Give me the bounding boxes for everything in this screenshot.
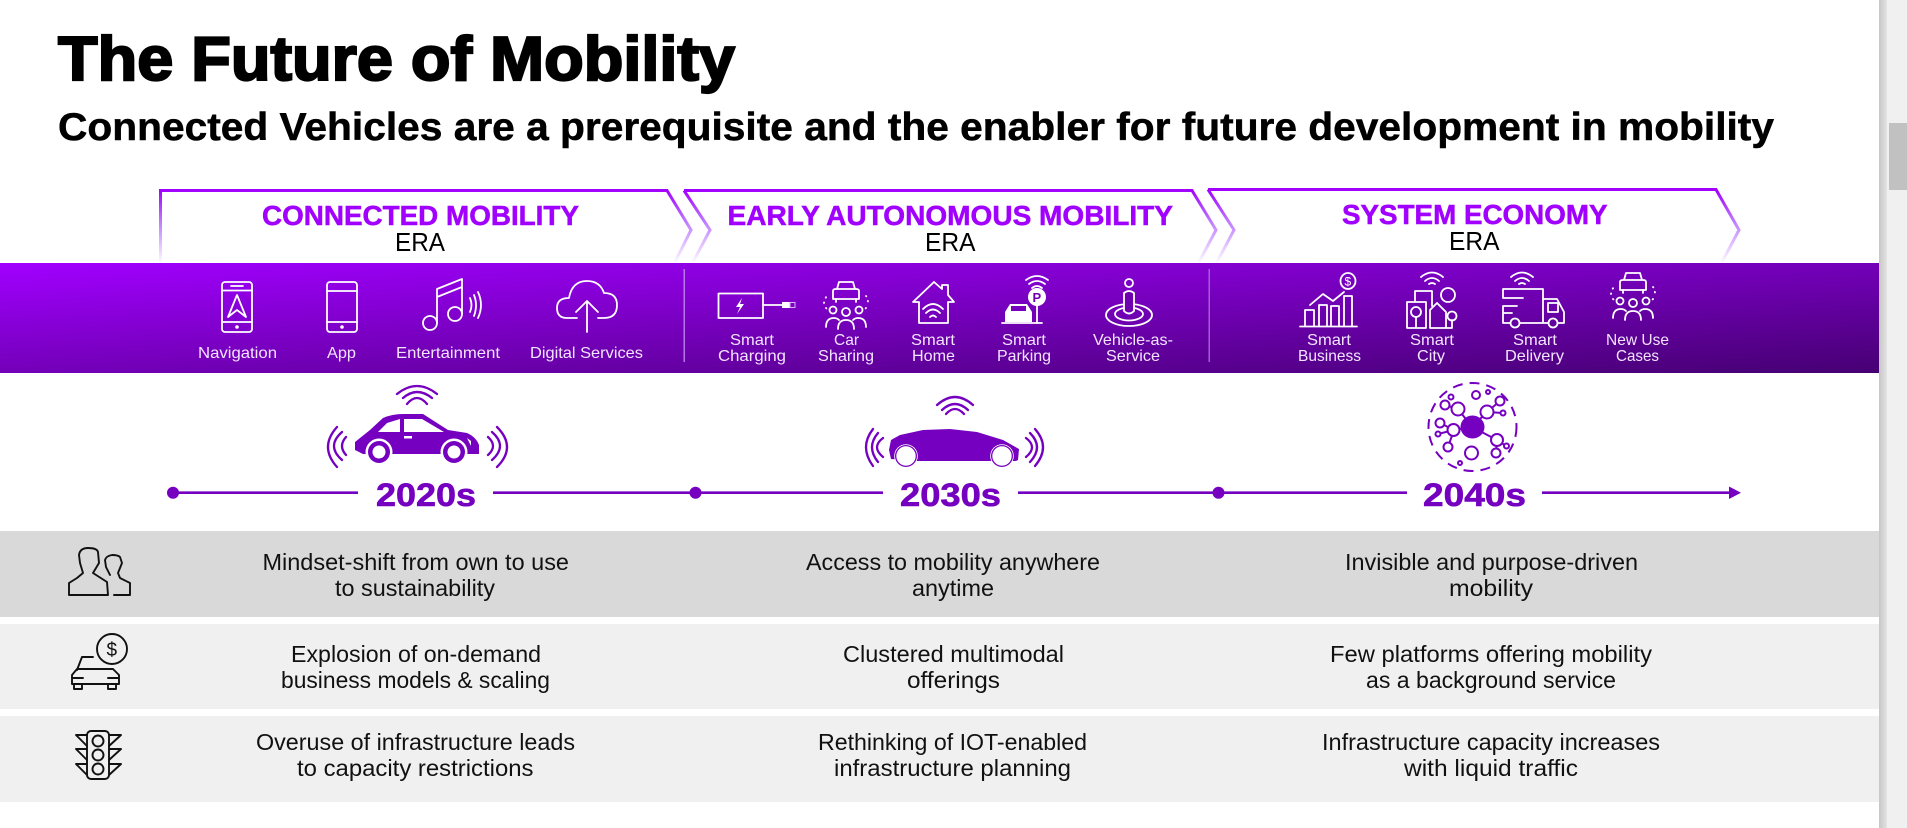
timeline: 2030s bbox=[900, 477, 1001, 513]
panel: business models row: Clustered multimodal bbox=[843, 641, 1064, 667]
icon: car with dollar coin bbox=[72, 634, 127, 689]
panel: infrastructure row bbox=[0, 716, 1879, 802]
timeline: 2040s bbox=[1423, 477, 1526, 513]
service: smart city: Smart bbox=[1410, 332, 1455, 349]
service: navigation: Navigation bbox=[198, 345, 277, 362]
band divider one bbox=[684, 269, 685, 362]
icon: connected car bbox=[328, 386, 507, 467]
service: smart city bbox=[1407, 272, 1456, 365]
service: navigation bbox=[198, 282, 277, 362]
service: smart parking bbox=[997, 276, 1051, 365]
era header: system economy: ERA bbox=[1449, 226, 1500, 256]
service: smart charging: Charging bbox=[718, 348, 786, 365]
service: smart delivery: Smart bbox=[1513, 332, 1558, 349]
purple services band bbox=[0, 263, 1879, 373]
service: smart delivery bbox=[1503, 272, 1564, 365]
service: app bbox=[327, 282, 357, 362]
panel: mindset row: anytime bbox=[912, 575, 994, 601]
icon: people bbox=[69, 548, 130, 595]
era header: connected mobility bbox=[160, 190, 691, 264]
icon: car with dollar coin: $ bbox=[106, 640, 118, 661]
service: car sharing: Sharing bbox=[818, 348, 874, 365]
service: smart home bbox=[911, 282, 956, 365]
era header: early autonomous mobility: ERA bbox=[925, 227, 976, 257]
service: entertainment bbox=[396, 279, 501, 362]
era header: early autonomous mobility bbox=[684, 190, 1216, 264]
service: smart city: City bbox=[1417, 348, 1445, 365]
panel: mindset row: Invisible and purpose-driven bbox=[1345, 549, 1638, 575]
panel: business models row: business models & scaling bbox=[281, 667, 550, 693]
panel: infrastructure row: Overuse of infrastructure leads bbox=[256, 729, 575, 755]
panel: infrastructure row: Rethinking of IOT-enabled bbox=[818, 729, 1087, 755]
title: The Future of Mobility bbox=[58, 25, 736, 94]
panel: mindset row: to sustainability bbox=[335, 575, 496, 601]
panel: business models row: Few platforms offering mobility bbox=[1330, 641, 1653, 667]
service: new use cases: Cases bbox=[1616, 348, 1659, 365]
service: smart parking: Smart bbox=[1002, 332, 1047, 349]
panel: mindset row bbox=[0, 531, 1879, 617]
timeline: 2020s bbox=[376, 477, 476, 513]
service: digital services bbox=[530, 281, 643, 362]
service: smart business: Smart bbox=[1307, 332, 1352, 349]
service: car sharing: Car bbox=[834, 332, 860, 349]
service: smart delivery: Delivery bbox=[1505, 348, 1564, 365]
era header: connected mobility: ERA bbox=[395, 227, 446, 257]
panel: business models row bbox=[0, 624, 1879, 709]
era header: system economy: SYSTEM ECONOMY bbox=[1342, 199, 1608, 230]
panel: mindset row: mobility bbox=[1449, 575, 1534, 601]
service: smart business bbox=[1298, 273, 1361, 365]
service: smart business: Business bbox=[1298, 348, 1361, 365]
service: new use cases bbox=[1606, 273, 1669, 365]
service: smart business: $ bbox=[1344, 274, 1352, 288]
service: smart charging: Smart bbox=[730, 332, 775, 349]
era header: connected mobility: CONNECTED MOBILITY bbox=[262, 200, 579, 231]
service: vehicle-as-service: Service bbox=[1106, 348, 1160, 365]
panel: infrastructure row: infrastructure planning bbox=[834, 755, 1071, 781]
timeline bbox=[167, 477, 1741, 513]
service: smart home: Home bbox=[912, 348, 955, 365]
panel: mindset row: Mindset-shift from own to use bbox=[262, 549, 569, 575]
service: digital services: Digital Services bbox=[530, 345, 643, 362]
service: app: App bbox=[327, 345, 356, 362]
icon: traffic light bbox=[76, 731, 121, 779]
service: smart charging bbox=[718, 294, 795, 365]
panel: business models row: offerings bbox=[907, 667, 1000, 693]
icon: autonomous car bbox=[866, 397, 1043, 468]
service: smart parking: Parking bbox=[997, 348, 1051, 365]
subtitle: Connected Vehicles are a prerequisite and the enabler for future development in mobility bbox=[58, 106, 1774, 149]
band divider two bbox=[1208, 269, 1210, 362]
scrollbar bbox=[1879, 0, 1907, 828]
panel: business models row: Explosion of on-demand bbox=[291, 641, 541, 667]
service: smart parking: P bbox=[1032, 290, 1042, 305]
service: vehicle-as-service: Vehicle-as- bbox=[1093, 332, 1173, 349]
service: vehicle-as-service bbox=[1093, 279, 1173, 365]
era header: system economy bbox=[1208, 190, 1739, 264]
service: smart home: Smart bbox=[911, 332, 956, 349]
panel: infrastructure row: Infrastructure capacity increases bbox=[1322, 729, 1660, 755]
panel: infrastructure row: with liquid traffic bbox=[1403, 755, 1578, 781]
panel: infrastructure row: to capacity restrictions bbox=[297, 755, 534, 781]
service: car sharing bbox=[818, 282, 874, 365]
service: entertainment: Entertainment bbox=[396, 345, 501, 362]
panel: mindset row: Access to mobility anywhere bbox=[806, 549, 1100, 575]
icon: system network bbox=[1428, 383, 1516, 471]
service: new use cases: New Use bbox=[1606, 332, 1669, 349]
era header: early autonomous mobility: EARLY AUTONOMOUS MOBILITY bbox=[728, 200, 1173, 231]
panel: business models row: as a background service bbox=[1366, 667, 1616, 693]
